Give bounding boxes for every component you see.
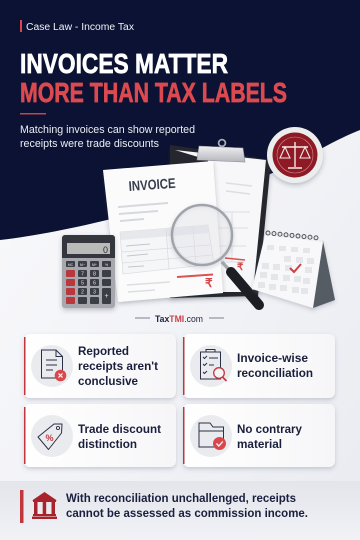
panel: reported receipts: receipts aren't <box>78 359 158 373</box>
icon: calculator: M− <box>80 263 85 267</box>
icon: percent tag: % <box>46 433 54 443</box>
panel: invoice-wise reconciliation: reconciliation <box>237 366 313 380</box>
panel: reported receipts <box>24 334 176 398</box>
panel: trade discount <box>24 404 176 467</box>
icon: desk calendar <box>252 231 335 308</box>
panel: no contrary material: material <box>237 437 282 451</box>
icon: calculator: 3 <box>93 290 96 296</box>
icon: calculator: % <box>105 263 108 267</box>
panel: invoice-wise reconciliation <box>183 334 335 398</box>
illustration: document group <box>103 140 271 305</box>
title <box>20 48 287 108</box>
icon: clipboard <box>170 140 271 298</box>
panel: conclusion band <box>0 481 360 540</box>
panel: no contrary material <box>183 404 335 467</box>
panel: no contrary material: No contrary <box>237 422 302 436</box>
panel: trade discount: Trade discount <box>78 422 161 436</box>
subtitle: receipts were trade discounts <box>20 138 159 150</box>
icon: scales of justice seal <box>267 127 323 183</box>
title: INVOICES MATTER <box>20 48 228 79</box>
icon: calculator: 0 <box>103 245 108 255</box>
title underline <box>20 113 46 114</box>
subtitle: Matching invoices can show reported <box>20 124 195 136</box>
icon: checklist with magnifier <box>200 350 226 381</box>
icon: rupee mark on clipboard sheet: ₹ <box>237 262 244 273</box>
brand footer <box>135 314 224 324</box>
icon: calculator <box>62 235 115 308</box>
icon: magnifying glass <box>172 205 259 305</box>
icon: invoice paper: ₹ <box>205 276 213 290</box>
panel: conclusion band: cannot be assessed as commission income. <box>66 506 308 520</box>
icon: folder with check <box>199 423 226 450</box>
icon: calculator: 8 <box>93 272 96 278</box>
icon: courthouse <box>32 492 57 519</box>
panel: invoice-wise reconciliation: Invoice-wise <box>237 351 308 365</box>
icon: calculator: 6 <box>93 280 96 286</box>
icon: rupee mark on clipboard sheet <box>225 258 245 273</box>
icon: calculator: + <box>104 293 109 300</box>
eyebrow label: Case Law - Income Tax <box>26 22 134 33</box>
icon: calculator: 7 <box>81 272 84 278</box>
invoice heading: INVOICE <box>128 175 176 194</box>
icon: document with cross <box>42 350 66 381</box>
panel: reported receipts: Reported <box>78 344 129 358</box>
icon: calculator: MC <box>68 263 74 267</box>
icon: calculator: 5 <box>81 280 84 286</box>
icon: calculator: M+ <box>92 263 97 267</box>
icon: percent tag <box>38 424 62 450</box>
icon: calculator: 2 <box>81 290 84 296</box>
icon: invoice paper <box>103 161 223 302</box>
subtitle <box>20 124 195 150</box>
panel: trade discount: distinction <box>78 437 137 451</box>
panel: conclusion band: With reconciliation unchallenged, receipts <box>66 491 296 505</box>
brand footer: TaxTMI.com <box>155 314 203 324</box>
panel: reported receipts: conclusive <box>78 374 138 388</box>
